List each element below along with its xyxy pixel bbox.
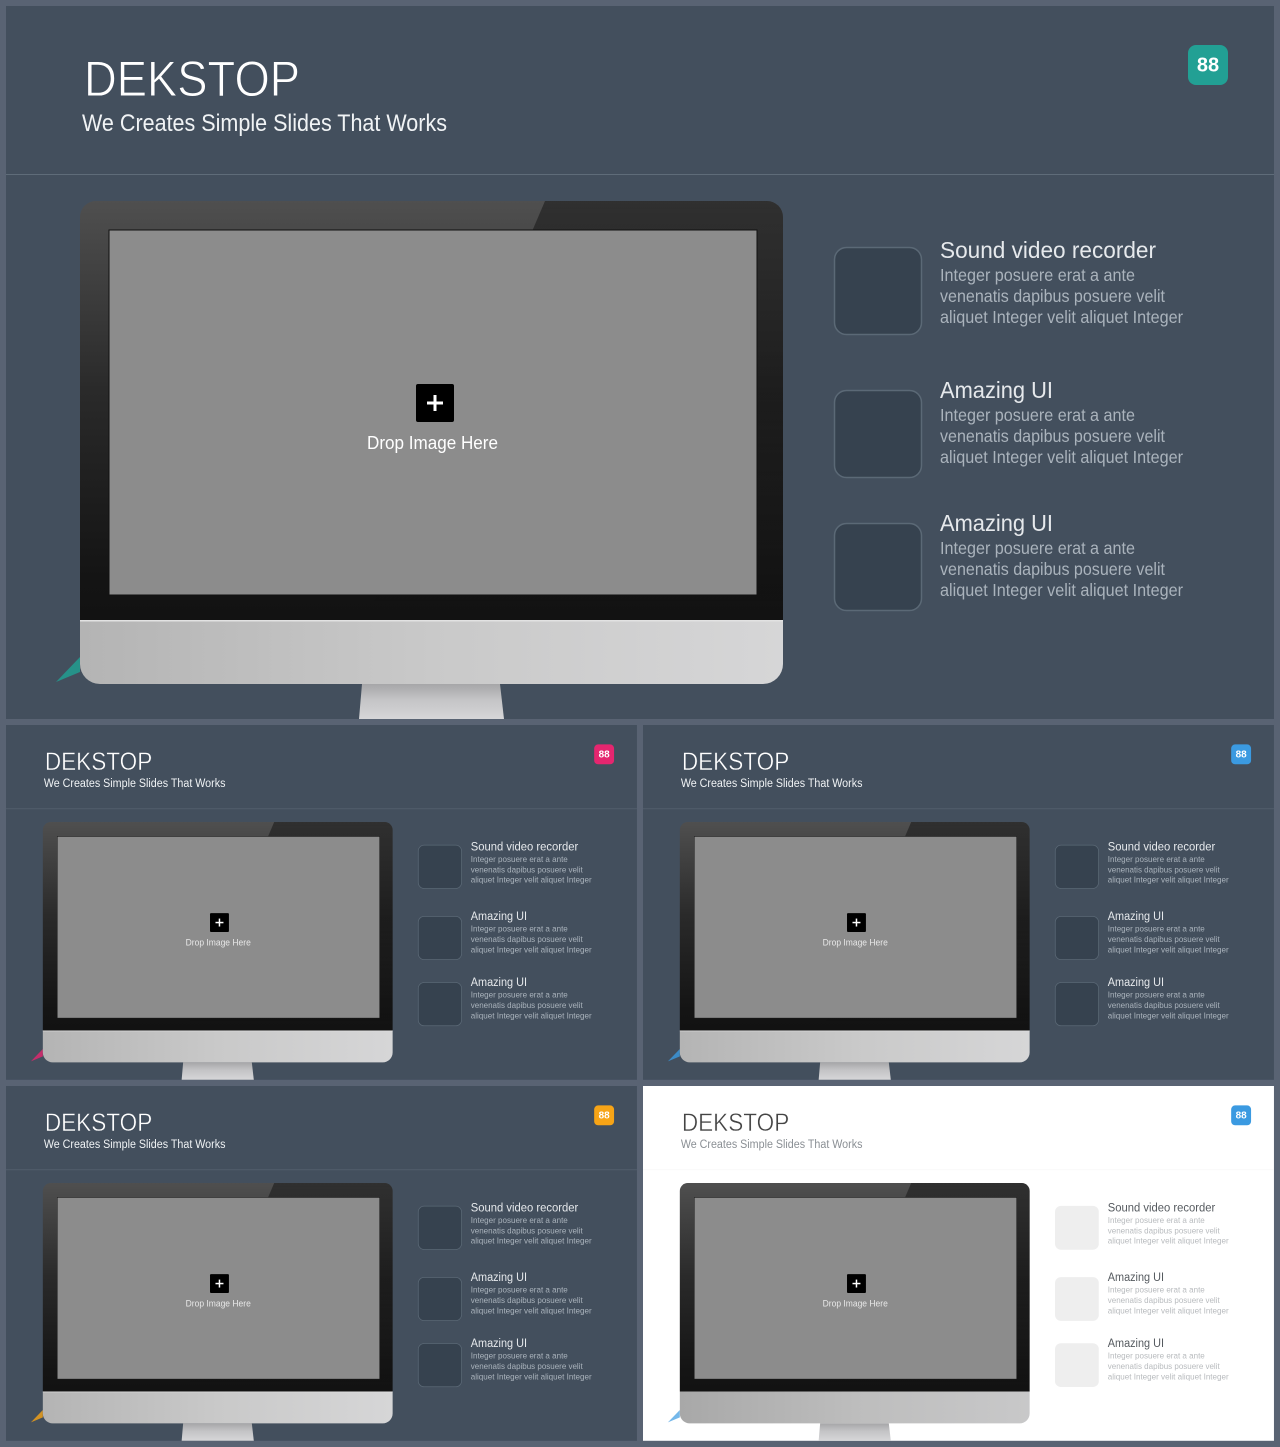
icon: wing accent — [31, 1049, 43, 1061]
bezel gloss — [366, 201, 783, 620]
bezel gloss — [822, 1183, 1030, 1392]
feature text: aliquet Integer velit aliquet Integer — [1108, 944, 1229, 954]
feature: amazing UI 1 — [1055, 1271, 1229, 1321]
drop image label: Drop Image Here — [823, 1298, 888, 1308]
feature text — [1108, 1271, 1229, 1315]
icon placeholder — [1055, 845, 1099, 888]
drop image label: Drop Image Here — [367, 433, 498, 453]
feature text: Integer posuere erat a ante — [940, 405, 1135, 425]
feature text: Amazing UI — [940, 510, 1053, 536]
panel: slide variant white — [643, 1086, 1274, 1441]
monitor stand — [182, 1423, 254, 1441]
monitor bezel — [80, 201, 783, 620]
icon placeholder — [1055, 916, 1099, 960]
feature text: Amazing UI — [1108, 1337, 1164, 1350]
title: DEKSTOP — [84, 51, 300, 107]
drop image label: Drop Image Here — [823, 937, 888, 947]
page number badge: 88 — [599, 750, 610, 761]
icon placeholder — [418, 983, 462, 1026]
feature text: venenatis dapibus posuere velit — [1108, 934, 1220, 944]
feature text: Integer posuere erat a ante — [471, 1351, 568, 1361]
desktop monitor mockup — [31, 1183, 393, 1441]
page number badge — [594, 744, 614, 764]
feature text: venenatis dapibus posuere velit — [1108, 864, 1220, 874]
icon placeholder — [834, 524, 922, 610]
subtitle: We Creates Simple Slides That Works — [681, 776, 862, 790]
feature text — [471, 1271, 592, 1315]
feature: sound video recorder — [1055, 1201, 1229, 1250]
image placeholder screen — [694, 836, 1017, 1018]
feature text: venenatis dapibus posuere velit — [471, 1361, 583, 1371]
feature: amazing UI 2 — [1055, 976, 1229, 1026]
icon placeholder — [418, 845, 462, 888]
monitor bezel — [43, 1183, 393, 1392]
subtitle: We Creates Simple Slides That Works — [82, 110, 447, 137]
desktop monitor mockup — [668, 822, 1030, 1080]
desktop monitor mockup — [56, 201, 783, 719]
feature text: venenatis dapibus posuere velit — [1108, 1361, 1220, 1371]
feature text: Amazing UI — [471, 1337, 527, 1350]
monitor bezel — [680, 822, 1030, 1031]
feature text — [1108, 976, 1229, 1021]
feature text: Amazing UI — [471, 976, 527, 989]
feature text — [940, 237, 1183, 327]
feature text: aliquet Integer velit aliquet Integer — [940, 447, 1183, 467]
feature text: aliquet Integer velit aliquet Integer — [471, 1236, 592, 1246]
feature text: venenatis dapibus posuere velit — [471, 1295, 583, 1305]
feature text: Amazing UI — [1108, 1271, 1164, 1284]
feature: amazing UI 2 — [418, 1337, 592, 1387]
feature text — [1108, 910, 1229, 954]
feature text: Amazing UI — [471, 910, 527, 923]
feature text: Sound video recorder — [471, 1201, 578, 1214]
feature: amazing UI 2 — [1055, 1337, 1229, 1387]
feature text — [940, 377, 1183, 467]
feature text: aliquet Integer velit aliquet Integer — [1108, 1305, 1229, 1315]
icon: plus button — [416, 384, 454, 422]
icon: wing accent — [668, 1410, 680, 1422]
feature: amazing UI 2 — [834, 510, 1183, 610]
feature text: venenatis dapibus posuere velit — [471, 1000, 583, 1010]
feature text: venenatis dapibus posuere velit — [471, 864, 583, 874]
feature text: aliquet Integer velit aliquet Integer — [471, 1011, 592, 1021]
feature text: aliquet Integer velit aliquet Integer — [1108, 875, 1229, 885]
page number badge — [594, 1105, 614, 1125]
monitor chin — [680, 1031, 1030, 1062]
drop image label: Drop Image Here — [186, 1298, 251, 1308]
feature text — [471, 976, 592, 1021]
monitor bezel — [680, 1183, 1030, 1392]
feature: sound video recorder — [1055, 840, 1229, 888]
feature text: Integer posuere erat a ante — [940, 265, 1135, 285]
page number badge: 88 — [1236, 750, 1247, 761]
feature text: Integer posuere erat a ante — [1108, 924, 1205, 934]
feature: sound video recorder — [418, 840, 592, 888]
desktop monitor mockup — [668, 1183, 1030, 1441]
bezel gloss — [822, 822, 1030, 1031]
feature text: Integer posuere erat a ante — [471, 990, 568, 1000]
feature text: aliquet Integer velit aliquet Integer — [471, 944, 592, 954]
monitor stand — [819, 1423, 891, 1441]
icon placeholder — [1055, 1206, 1099, 1250]
icon: plus button — [847, 913, 866, 932]
feature text — [1108, 1337, 1229, 1382]
monitor chin — [43, 1392, 393, 1423]
icon placeholder — [1055, 983, 1099, 1026]
image placeholder screen — [57, 836, 380, 1018]
image placeholder screen — [694, 1197, 1017, 1379]
icon placeholder — [1055, 1343, 1099, 1387]
monitor stand — [819, 1062, 891, 1080]
feature text: Amazing UI — [940, 377, 1053, 403]
icon placeholder — [834, 390, 922, 478]
feature text — [1108, 1201, 1229, 1246]
bezel gloss — [185, 822, 393, 1031]
feature text: aliquet Integer velit aliquet Integer — [471, 1372, 592, 1382]
monitor stand — [182, 1062, 254, 1080]
image placeholder screen — [109, 230, 757, 595]
feature text: Amazing UI — [1108, 976, 1164, 989]
page number badge — [1231, 744, 1251, 764]
feature text: Integer posuere erat a ante — [471, 1285, 568, 1295]
icon: wing accent — [56, 657, 80, 682]
title: DEKSTOP — [682, 1109, 789, 1137]
desktop monitor mockup — [31, 822, 393, 1080]
feature text: Sound video recorder — [1108, 1201, 1215, 1214]
panel: main slide teal — [6, 6, 1274, 719]
feature text — [1108, 840, 1229, 885]
icon placeholder — [418, 1277, 462, 1321]
page number badge: 88 — [1197, 54, 1219, 76]
feature text: aliquet Integer velit aliquet Integer — [1108, 1011, 1229, 1021]
panel: slide variant pink — [6, 725, 637, 1080]
feature text: Amazing UI — [471, 1271, 527, 1284]
feature text: Amazing UI — [1108, 910, 1164, 923]
subtitle: We Creates Simple Slides That Works — [44, 1137, 225, 1151]
feature: amazing UI 1 — [418, 910, 592, 960]
monitor chin — [43, 1031, 393, 1062]
subtitle: We Creates Simple Slides That Works — [681, 1137, 862, 1151]
feature text: Sound video recorder — [1108, 840, 1215, 853]
page number badge: 88 — [599, 1111, 610, 1122]
feature text: venenatis dapibus posuere velit — [471, 1225, 583, 1235]
feature text: venenatis dapibus posuere velit — [940, 426, 1165, 446]
feature text: Sound video recorder — [471, 840, 578, 853]
feature text: aliquet Integer velit aliquet Integer — [1108, 1372, 1229, 1382]
bezel gloss — [185, 1183, 393, 1392]
panel: slide variant orange — [6, 1086, 637, 1441]
feature text — [471, 910, 592, 954]
icon placeholder — [418, 916, 462, 960]
feature text: Sound video recorder — [940, 237, 1156, 263]
page number badge: 88 — [1236, 1111, 1247, 1122]
feature text: aliquet Integer velit aliquet Integer — [471, 875, 592, 885]
panel: slide variant blue — [643, 725, 1274, 1080]
feature text: Integer posuere erat a ante — [1108, 1351, 1205, 1361]
feature text: venenatis dapibus posuere velit — [1108, 1000, 1220, 1010]
feature text: Integer posuere erat a ante — [1108, 854, 1205, 864]
feature text: Integer posuere erat a ante — [471, 854, 568, 864]
icon: wing accent — [31, 1410, 43, 1422]
feature text: aliquet Integer velit aliquet Integer — [471, 1305, 592, 1315]
page number badge — [1188, 45, 1228, 85]
icon: plus button — [847, 1274, 866, 1293]
feature: sound video recorder — [418, 1201, 592, 1249]
icon placeholder — [1055, 1277, 1099, 1321]
feature text: aliquet Integer velit aliquet Integer — [940, 307, 1183, 327]
feature text: Integer posuere erat a ante — [1108, 1215, 1205, 1225]
feature text: venenatis dapibus posuere velit — [940, 559, 1165, 579]
drop image label: Drop Image Here — [186, 937, 251, 947]
feature text: aliquet Integer velit aliquet Integer — [940, 580, 1183, 600]
feature text — [471, 840, 592, 885]
feature: amazing UI 1 — [834, 377, 1183, 478]
feature text: Integer posuere erat a ante — [471, 924, 568, 934]
icon: plus button — [210, 913, 229, 932]
feature text: Integer posuere erat a ante — [1108, 1285, 1205, 1295]
title: DEKSTOP — [45, 748, 152, 776]
feature: sound video recorder — [834, 237, 1183, 334]
monitor chin — [80, 620, 783, 684]
feature text — [471, 1201, 592, 1246]
subtitle: We Creates Simple Slides That Works — [44, 776, 225, 790]
feature text — [471, 1337, 592, 1382]
feature text: venenatis dapibus posuere velit — [1108, 1225, 1220, 1235]
feature text: Integer posuere erat a ante — [940, 538, 1135, 558]
icon placeholder — [418, 1344, 462, 1387]
monitor stand — [359, 684, 504, 719]
feature: amazing UI 2 — [418, 976, 592, 1026]
monitor bezel — [43, 822, 393, 1031]
title: DEKSTOP — [45, 1109, 152, 1137]
feature text: aliquet Integer velit aliquet Integer — [1108, 1236, 1229, 1246]
icon: plus button — [210, 1274, 229, 1293]
title: DEKSTOP — [682, 748, 789, 776]
feature: amazing UI 1 — [418, 1271, 592, 1321]
icon placeholder — [834, 248, 922, 334]
feature: amazing UI 1 — [1055, 910, 1229, 960]
image placeholder screen — [57, 1197, 380, 1379]
feature text — [940, 510, 1183, 600]
icon: wing accent — [668, 1049, 680, 1061]
monitor chin — [680, 1392, 1030, 1423]
feature text: Integer posuere erat a ante — [471, 1215, 568, 1225]
feature text: venenatis dapibus posuere velit — [940, 286, 1165, 306]
feature text: venenatis dapibus posuere velit — [471, 934, 583, 944]
icon placeholder — [418, 1206, 462, 1249]
page number badge — [1231, 1105, 1251, 1125]
feature text: Integer posuere erat a ante — [1108, 990, 1205, 1000]
feature text: venenatis dapibus posuere velit — [1108, 1295, 1220, 1305]
